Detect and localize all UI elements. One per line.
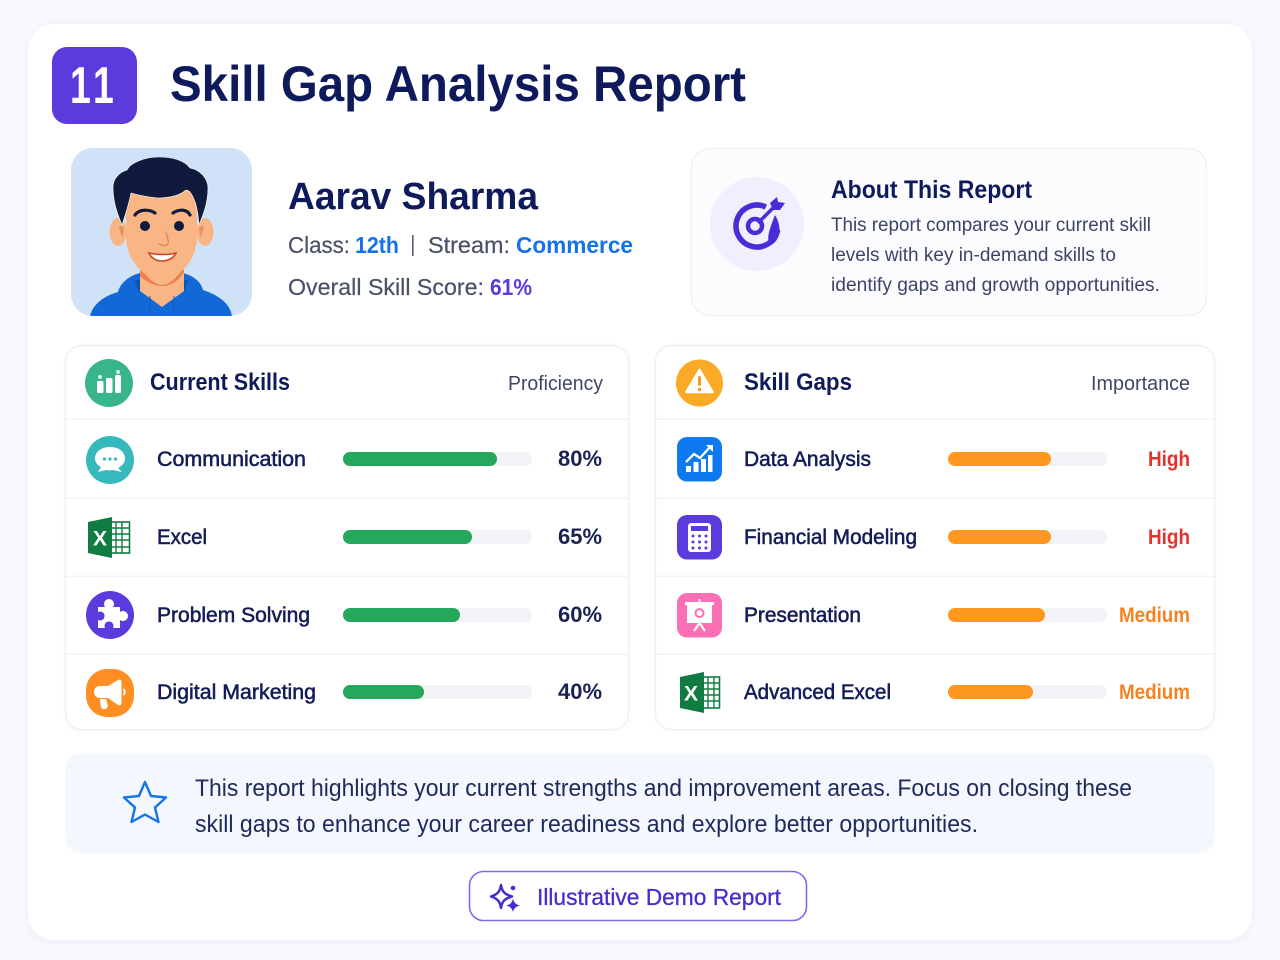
row: data analysis: Data Analysis	[744, 448, 871, 471]
title: Skill Gap Analysis Report	[170, 56, 746, 112]
icon: excel	[88, 517, 130, 558]
icon: excel: X	[684, 682, 698, 706]
overall skill score: Overall Skill Score:	[288, 274, 484, 300]
icon: growth chart	[677, 437, 722, 482]
icon: star	[124, 782, 166, 822]
class and stream: Stream:	[428, 232, 510, 258]
icon: presentation board	[677, 593, 722, 638]
panel: about this report: About This Report	[831, 176, 1033, 204]
demo label pill	[470, 872, 806, 920]
panel: current skills	[66, 346, 628, 730]
icon: excel: X	[93, 528, 107, 550]
row: digital marketing: Digital Marketing	[157, 681, 316, 704]
row: presentation: Presentation	[744, 604, 861, 627]
about description	[831, 215, 1160, 296]
icon: megaphone	[86, 669, 134, 717]
panel: skill gaps: Importance	[1091, 373, 1190, 395]
row: communication	[86, 436, 602, 484]
row: presentation	[677, 593, 1190, 638]
about description: levels with key in-demand skills to	[831, 245, 1116, 266]
row: financial modeling: High	[1148, 526, 1190, 549]
icon: target	[710, 177, 804, 271]
row: digital marketing: 40%	[558, 679, 602, 704]
icon: warning	[676, 360, 723, 406]
row: communication: Communication	[157, 448, 306, 471]
icon: chat bubble	[86, 436, 134, 484]
class and stream: 12th	[355, 232, 399, 258]
row: advanced excel: Medium	[1119, 681, 1190, 704]
number badge: 11	[70, 56, 114, 114]
row: problem solving: 60%	[558, 602, 602, 627]
row: advanced excel	[680, 672, 1190, 713]
row: excel	[88, 517, 602, 558]
callout: summary note: This report highlights your current strengths and improvement areas. Focus on closing these	[195, 775, 1132, 802]
panel: skill gaps: Skill Gaps	[744, 369, 852, 396]
overall skill score: 61%	[490, 274, 532, 300]
icon: puzzle piece	[86, 591, 134, 639]
panel: about this report	[692, 148, 1206, 316]
row: problem solving	[86, 591, 602, 639]
panel: skill gaps	[656, 346, 1214, 730]
about description: This report compares your current skill	[831, 215, 1151, 236]
about description: identify gaps and growth opportunities.	[831, 275, 1160, 296]
row: digital marketing	[86, 669, 602, 717]
row: advanced excel: Advanced Excel	[744, 681, 891, 704]
icon: sparkles	[491, 885, 520, 912]
student name: Aarav Sharma	[288, 176, 539, 218]
callout: summary note	[65, 754, 1215, 853]
class and stream: Class:	[288, 232, 350, 258]
class and stream	[288, 232, 633, 258]
row: excel: 65%	[558, 524, 602, 549]
icon: excel	[680, 672, 720, 713]
row: excel: Excel	[157, 526, 207, 549]
row: problem solving: Problem Solving	[157, 604, 310, 627]
demo label pill: Illustrative Demo Report	[537, 884, 782, 910]
row: presentation: Medium	[1119, 604, 1190, 627]
icon: calculator	[677, 515, 722, 560]
row: financial modeling: Financial Modeling	[744, 526, 917, 549]
panel: current skills: Proficiency	[508, 373, 603, 395]
callout: summary note: skill gaps to enhance your career readiness and explore better opportunities.	[195, 811, 978, 838]
row: data analysis	[677, 437, 1190, 482]
row: data analysis: High	[1148, 448, 1190, 471]
row: communication: 80%	[558, 446, 602, 471]
number badge	[52, 47, 137, 124]
icon: bar chart badge	[85, 359, 133, 407]
class and stream: Commerce	[516, 232, 633, 258]
avatar portrait	[71, 148, 252, 316]
row: financial modeling	[677, 515, 1190, 560]
panel: current skills: Current Skills	[150, 369, 290, 396]
